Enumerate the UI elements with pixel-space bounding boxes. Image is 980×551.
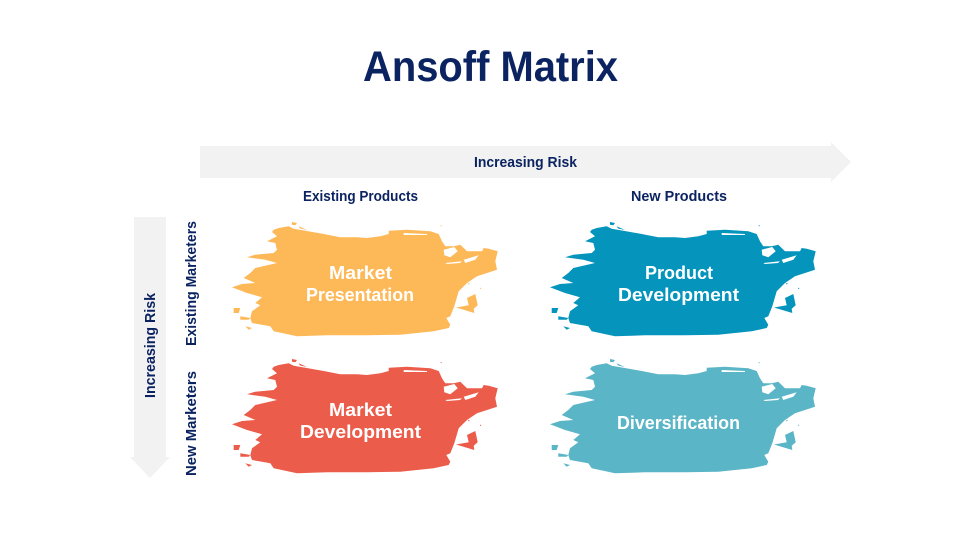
panel: market development: Development <box>300 421 421 442</box>
panel: market presentation <box>232 222 498 336</box>
panel: market development <box>232 359 498 473</box>
panel: market development: Market <box>329 399 392 420</box>
panel: market presentation: Presentation <box>306 284 414 305</box>
panel: product development <box>550 222 816 336</box>
column heading: existing products: Existing Products <box>303 189 418 205</box>
panel: diversification <box>550 359 816 473</box>
row heading: existing marketers: Existing Marketers <box>184 221 200 346</box>
row heading: new marketers: New Marketers <box>184 371 200 476</box>
arrow: vertical increasing risk <box>130 217 170 478</box>
arrow: horizontal increasing risk: Increasing Risk <box>474 154 578 171</box>
panel: diversification: Diversification <box>617 412 740 433</box>
panel: market presentation: Market <box>329 262 392 283</box>
arrow: vertical increasing risk: Increasing Risk <box>142 292 159 398</box>
title: Ansoff Matrix <box>363 43 618 91</box>
column heading: new products: New Products <box>631 189 727 205</box>
arrow: horizontal increasing risk <box>200 142 851 182</box>
panel: product development: Product <box>645 262 713 283</box>
panel: product development: Development <box>618 284 739 305</box>
